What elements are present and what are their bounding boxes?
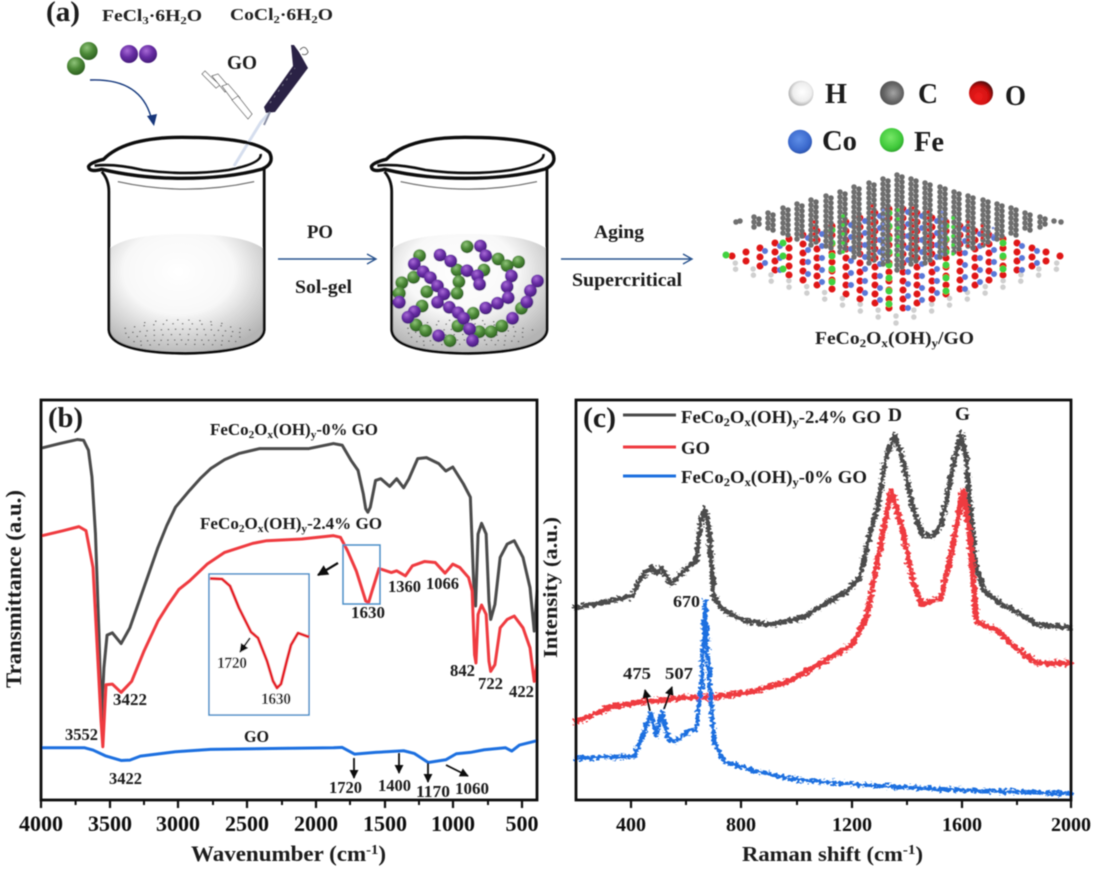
product label: y: [932, 336, 938, 350]
peak labels: 1360: [388, 577, 421, 596]
step label PO: PO: [307, 222, 333, 243]
legend: x: [745, 415, 751, 429]
step label Supercritical: Supercritical: [572, 270, 682, 291]
Raman curve: 2.4% GO: [576, 434, 1071, 628]
legend: -2.4% GO: [799, 407, 881, 427]
reagent label CoCl2: 2: [274, 14, 280, 26]
Raman curve: GO: [576, 490, 1071, 722]
legend: -0% GO: [799, 467, 867, 487]
FTIR curve: 0% GO: [42, 440, 537, 722]
beaker 1: GO solution: [89, 137, 271, 353]
product label: FeCo: [815, 328, 856, 348]
series label 2.4% GO: x: [258, 523, 264, 535]
peak labels: 1066: [426, 574, 459, 593]
reagent label FeCl3: ·6H: [149, 6, 180, 25]
peak labels: 422: [509, 682, 534, 701]
reagent label FeCl3: 3: [142, 15, 149, 27]
product label: (OH): [888, 328, 932, 349]
icon: pipette: [234, 45, 308, 166]
GO label: GO: [227, 52, 257, 74]
peak labels: 3552: [65, 725, 98, 744]
legend: y: [792, 475, 799, 489]
reagent label FeCl3: 2: [180, 15, 187, 27]
x axis title: Raman shift (cm: [742, 842, 891, 866]
legend: (OH): [751, 467, 792, 488]
series label 0% GO: -0% GO: [316, 420, 378, 439]
x axis title: ): [378, 841, 386, 866]
highlight box around 1630 peak: [343, 545, 380, 604]
inset: zoomed 1630 peak: 1720: [217, 655, 247, 672]
panel c: Raman chart: [540, 400, 1091, 866]
x tick labels: [19, 811, 538, 836]
x tick labels: 400: [616, 814, 646, 836]
reagent label CoCl2: CoCl: [230, 5, 268, 24]
Raman curve: 0% GO: [576, 601, 1071, 794]
x tick labels: 1500: [363, 811, 407, 836]
legend: atoms: C: [918, 78, 938, 110]
legend: 2: [724, 415, 730, 429]
series label 2.4% GO: 2: [239, 523, 245, 535]
reagent label CoCl2: O: [318, 5, 333, 24]
x tick labels: 1200: [832, 814, 872, 836]
x axis title: -1: [366, 843, 378, 858]
x axis title: Wavenumber (cm: [191, 841, 359, 866]
legend: atoms: [788, 78, 1026, 158]
molecular structure: layered FeCo2Ox(OH)y on GO: [726, 175, 1061, 323]
legend: atoms: Co: [822, 125, 857, 157]
product label: 2: [860, 336, 866, 350]
product label: /GO: [937, 328, 974, 348]
legend: atoms: O: [1005, 80, 1026, 112]
panel b: FTIR chart: [1, 400, 538, 866]
peak labels: 1630: [351, 603, 385, 622]
product label: O: [866, 328, 881, 348]
arrow: aging supercritical step: [561, 254, 692, 264]
inset: zoomed 1630 peak: 1630: [261, 691, 291, 708]
x tick labels: [616, 814, 1091, 836]
arrow: box to inset: [318, 563, 338, 575]
peak labels: G: [955, 404, 970, 425]
inset: zoomed 1630 peak: [209, 574, 309, 715]
step label Sol-gel: Sol-gel: [295, 277, 352, 298]
peak labels: 722: [478, 674, 503, 693]
annotation arrows: 475 and 507: [645, 687, 672, 711]
y axis title: Transmittance (a.u.): [1, 490, 26, 688]
arrow: PO sol-gel step: [278, 254, 376, 264]
step label Aging: Aging: [594, 222, 645, 243]
beaker 2: sol-gel: [371, 137, 554, 353]
x tick labels: 4000: [19, 811, 63, 836]
x tick labels: 500: [506, 811, 538, 836]
series label 0% GO: x: [267, 429, 274, 441]
icon: purple cobalt precursor spheres: [120, 45, 157, 63]
legend: GO: [681, 438, 710, 458]
FTIR curve: GO: [42, 741, 537, 762]
series label 2.4% GO: FeCo: [200, 514, 238, 533]
legend: FeCo: [681, 467, 722, 487]
x tick labels: 800: [726, 814, 756, 836]
green particles in gel: [393, 240, 528, 347]
annotation arrows: GO peaks: [354, 753, 468, 782]
peak labels: 670: [673, 592, 700, 611]
purple particles in gel: [393, 240, 544, 347]
peak labels: 1400: [378, 776, 411, 795]
peak labels: 1060: [455, 779, 489, 798]
series label 0% GO: y: [311, 429, 317, 441]
reagent label CoCl2: 2: [311, 14, 318, 26]
x tick labels: 3500: [88, 811, 132, 836]
legend: FeCo: [681, 407, 722, 427]
series label 2.4% GO: -2.4% GO: [307, 514, 382, 533]
peak labels: 1170: [416, 782, 450, 801]
peak labels: D: [888, 405, 902, 426]
icon: green iron precursor spheres: [67, 42, 98, 75]
x axis title: ): [915, 842, 923, 866]
peak labels: 3422: [113, 690, 147, 709]
series label 2.4% GO: O: [245, 514, 258, 533]
peak labels: 842: [450, 661, 475, 680]
product label: x: [881, 336, 888, 350]
series label 0% GO: O: [254, 420, 268, 439]
x tick labels: 1000: [431, 811, 475, 836]
y axis title: Intensity (a.u.): [540, 517, 562, 658]
series label 0% GO: (OH): [273, 420, 311, 439]
series label 2.4% GO: y: [301, 523, 308, 535]
legend: atoms: H: [825, 78, 847, 110]
series label GO: GO: [244, 727, 269, 746]
peak labels: 3422: [109, 769, 142, 788]
legend: atoms: Fe: [914, 126, 944, 158]
series label 0% GO: 2: [249, 429, 255, 441]
chart frame and ticks: [576, 400, 1071, 808]
x axis title: -1: [903, 843, 915, 858]
peak labels: 1720: [329, 778, 362, 797]
chart frame and ticks: [41, 400, 537, 808]
x tick labels: 2000: [294, 811, 338, 836]
series label 2.4% GO: (OH): [264, 514, 301, 533]
legend: y: [792, 415, 799, 429]
peak labels: [65, 574, 534, 801]
legend: O: [730, 407, 745, 427]
x tick labels: 2500: [225, 811, 269, 836]
legend: [623, 407, 881, 489]
legend: (OH): [751, 407, 792, 428]
x tick labels: 1600: [942, 814, 982, 836]
FTIR curve: 2.4% GO: [42, 527, 537, 747]
panel a: synthesis scheme: [46, 0, 1061, 353]
peak labels: 507: [665, 664, 693, 683]
legend: 2: [724, 475, 730, 489]
x tick labels: 2000: [1051, 814, 1091, 836]
legend: O: [730, 467, 745, 487]
peak labels: [623, 404, 970, 683]
peak labels: 475: [623, 664, 651, 683]
x tick labels: 3000: [156, 811, 200, 836]
panel label b: (b): [48, 402, 83, 434]
reagent label FeCl3: FeCl: [102, 6, 137, 25]
legend: x: [745, 475, 751, 489]
reagent label FeCl3: O: [187, 6, 202, 25]
reagent label CoCl2: ·6H: [280, 5, 311, 24]
panel label c: (c): [583, 402, 616, 434]
icon: graphene oxide sheets: [202, 71, 252, 119]
arrow: precursors into beaker: [90, 80, 157, 126]
series label 0% GO: FeCo: [210, 420, 248, 439]
